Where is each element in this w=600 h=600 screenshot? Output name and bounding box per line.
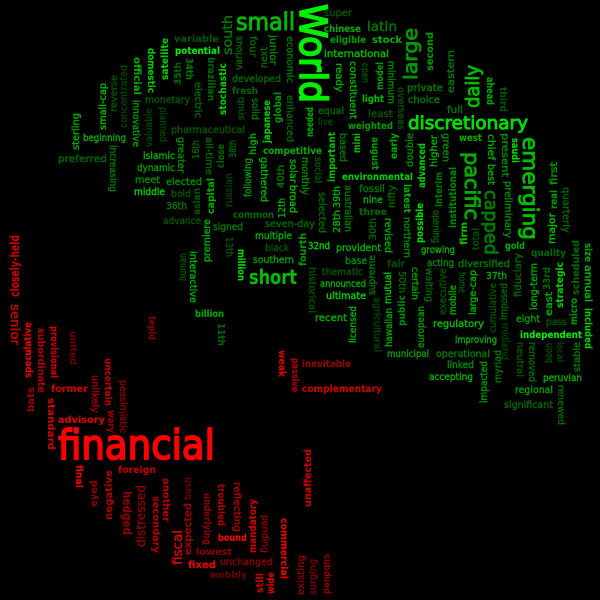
panel: green positive words: home (456, 272, 467, 293)
panel: green positive words: preliminary (502, 181, 513, 238)
panel: green positive words: innovative (130, 100, 141, 147)
panel: green positive words: diversified (458, 259, 510, 270)
panel: green positive words: nifty (387, 185, 398, 208)
panel: green positive words: 13th (223, 237, 234, 257)
panel: red negative words: mandatory (248, 499, 259, 553)
panel: red negative words: united (67, 331, 78, 365)
panel: green positive words: super (324, 8, 353, 19)
panel: green positive words: scheduled (571, 240, 582, 295)
panel: green positive words: variable (174, 34, 219, 45)
panel: green positive words: beginning (83, 133, 126, 144)
panel: red negative words: standard (45, 398, 56, 450)
panel: green positive words: asian (192, 188, 203, 215)
panel: green positive words: regulatory (433, 319, 484, 330)
panel: red negative words: surging (308, 559, 319, 595)
panel: red negative words: another (160, 478, 171, 522)
panel: green positive words: mini (352, 133, 363, 153)
panel: green positive words: greater (175, 137, 186, 174)
panel: green positive words: stock (372, 35, 402, 46)
panel: green positive words: monetary (145, 95, 190, 106)
panel: green positive words: electric (192, 82, 203, 118)
panel: red negative words: fixed (188, 560, 216, 571)
panel: green positive words: broad (287, 185, 298, 213)
panel: green positive words: concentrated (119, 65, 130, 128)
panel: green positive words: various (234, 36, 245, 70)
panel: green positive words: islamic (143, 151, 175, 162)
panel: red negative words: fiscal (171, 530, 186, 565)
panel: green positive words: latest (401, 184, 412, 213)
panel: green positive words: quality (531, 248, 566, 259)
panel: green positive words: impacted (479, 361, 490, 403)
panel: green positive words: 34th (183, 58, 194, 80)
panel: red negative words: wary (105, 410, 116, 433)
panel: green positive words: high (248, 133, 259, 155)
panel: green positive words: institutional (448, 167, 459, 228)
panel: green positive words: early (389, 133, 400, 159)
panel: green positive words: emerging (518, 137, 542, 240)
panel: green positive words: announced (320, 279, 366, 290)
panel: red negative words: speculative (23, 322, 34, 378)
panel: green positive words: neutral (514, 342, 525, 377)
panel: green positive words: boon (544, 343, 555, 363)
panel: green positive words: multiple (255, 231, 292, 242)
panel: red negative words: bush (183, 477, 194, 500)
panel: red negative words: underlying (201, 493, 212, 545)
panel: red negative words: pessimistic (117, 380, 128, 433)
panel: green positive words: elected (166, 177, 202, 188)
panel: red negative words: tepid (146, 316, 157, 340)
panel: green positive words: equal (318, 106, 344, 117)
panel: green positive words: live (318, 117, 333, 128)
panel: red negative words: negative (104, 470, 115, 520)
panel: green positive words: pharmaceutical (171, 125, 245, 136)
panel: green positive words: solar (287, 159, 298, 184)
panel: red negative words: hedged (120, 491, 134, 535)
panel: green positive words: chief (485, 134, 496, 161)
panel: green positive words: large-cap (468, 270, 479, 315)
panel: green positive words: supreme (367, 255, 378, 295)
panel: green positive words: higher (429, 134, 440, 167)
panel: green positive words: present (499, 133, 510, 177)
panel: green positive words: three (359, 207, 387, 218)
panel: green positive words: renewed (555, 385, 566, 425)
panel: green positive words: potential (175, 46, 220, 57)
panel: red negative words: weak (276, 350, 287, 377)
panel: green positive words: million (235, 249, 246, 281)
panel: green positive words: ahead (484, 77, 495, 105)
panel: red negative words: advisory (58, 415, 105, 426)
panel: green positive words: opening (430, 210, 441, 243)
panel: green positive words: 16th (191, 140, 202, 159)
panel: green positive words: real (549, 190, 560, 209)
panel: green positive words: overseas (395, 87, 406, 130)
panel: red negative words: inevitable (302, 359, 351, 370)
panel: green positive words: competitive (263, 146, 322, 157)
panel: red negative words (8, 235, 382, 595)
panel: green positive words: waiting (423, 268, 434, 302)
panel: red negative words: unlikely (89, 375, 100, 413)
panel: green positive words: 32nd (308, 241, 330, 252)
panel: green positive words: reverse (109, 75, 120, 112)
panel: green positive words: increasing (107, 145, 118, 192)
panel: green positive words: large (400, 28, 422, 80)
panel: green positive words: interim (434, 172, 445, 207)
panel: green positive words: human (178, 253, 189, 281)
panel: green positive words: small (236, 8, 295, 36)
panel: green positive words: russian (224, 173, 235, 207)
panel: green positive words: east (544, 292, 555, 316)
panel: green positive words: first (549, 162, 560, 185)
panel: green positive words: 38th (228, 140, 239, 158)
panel: green positive words: billion (195, 309, 224, 320)
panel: green positive words: capital (206, 178, 217, 214)
panel: green positive words: thematic (322, 267, 363, 278)
panel: green positive words: firm (459, 222, 470, 245)
panel: green positive words: nine (363, 195, 383, 206)
panel: green positive words: possible (415, 203, 426, 243)
panel: green positive words: total (471, 228, 482, 250)
panel: green positive words: snub (236, 97, 247, 120)
panel: green positive words: long-term (529, 263, 540, 310)
panel: red negative words: unchanged (220, 557, 273, 568)
panel: green positive words: advance (163, 216, 201, 227)
panel: green positive words: mobile (448, 285, 459, 315)
panel: green positive words: included (582, 308, 593, 349)
panel: green positive words: provident (336, 243, 381, 254)
panel: green positive words: west (459, 133, 482, 144)
panel: red negative words: reflecting (231, 482, 242, 532)
panel: green positive words: latin (367, 20, 397, 35)
panel: green positive words: eastern (446, 50, 457, 93)
panel: green positive words: executive (438, 268, 449, 315)
panel: green positive words: stable (572, 342, 583, 372)
panel: green positive words: south (221, 15, 236, 55)
panel: green positive words: solid (249, 98, 260, 120)
heading word: financial: financial (58, 421, 215, 469)
panel: green positive words: northern (401, 217, 412, 258)
panel: green positive words: australian (342, 185, 353, 232)
panel: red negative words: eyed (89, 480, 100, 507)
panel: green positive words: 37th (486, 271, 507, 282)
panel: green positive words: ready (333, 63, 344, 92)
panel: green positive words: japanese (262, 100, 273, 144)
panel: green positive words: model (375, 62, 386, 90)
panel: red negative words: secondary (150, 496, 161, 553)
panel: green positive words: 40th (276, 165, 287, 188)
panel: green positive words: strategic (555, 262, 566, 308)
panel: green positive words: chinese (324, 24, 361, 35)
panel: red negative words: bound (218, 533, 247, 544)
panel: green positive words: 28th (332, 210, 343, 233)
panel: green positive words: independent (520, 330, 582, 341)
panel: green positive words: black (265, 243, 289, 254)
panel: green positive words: green (440, 133, 451, 162)
panel: green positive words: peruvian (543, 373, 582, 384)
panel: green positive words: advanced (417, 143, 428, 188)
panel: green positive words: full (447, 105, 463, 116)
panel: green positive words: gold (505, 241, 525, 252)
panel: green positive words: valuable (144, 108, 155, 147)
panel: green positive words: 35th (173, 62, 184, 85)
panel: green positive words: eligible (330, 35, 366, 46)
panel: green positive words: mutual (383, 272, 394, 304)
panel: green positive words: cumulative (488, 283, 499, 333)
panel: green positive words: agricultural (371, 297, 382, 352)
panel: green positive words: municipal (387, 349, 429, 360)
panel: green positive words: signed (213, 222, 243, 233)
panel: green positive words: midland (499, 323, 510, 360)
panel: green positive words: european (416, 306, 427, 348)
panel: green positive words: light (362, 94, 384, 105)
panel: green positive words: saudi (509, 138, 520, 163)
panel: green positive words: close (216, 144, 227, 168)
panel: red negative words: still (255, 573, 266, 593)
panel: green positive words: 33rd (542, 267, 553, 290)
panel: green positive words: choice (408, 95, 440, 106)
panel: green positive words: daily (462, 65, 484, 108)
panel: green positive words: weighted (348, 121, 393, 132)
panel: green positive words: monthly (299, 157, 310, 195)
panel: green positive words: accepting (429, 372, 473, 383)
panel: red negative words: former (51, 384, 88, 395)
panel: red negative words: existing (296, 555, 307, 595)
panel: green positive words: hawaiian (384, 308, 395, 347)
panel: red negative words: provisional (48, 326, 59, 378)
panel: green positive words: fiduciary (513, 253, 524, 297)
panel: green positive words: southern (253, 255, 294, 266)
panel: green positive words: regional (515, 385, 553, 396)
panel: green positive words: global (273, 92, 284, 123)
panel: green positive words: august (369, 137, 380, 170)
panel: red negative words: pending (259, 515, 270, 553)
heading word: World: World (291, 4, 334, 103)
panel: green positive words (58, 4, 593, 425)
panel: green positive words: pacific (460, 152, 484, 220)
panel: green positive words: important (327, 132, 338, 182)
panel: green positive words: needed (305, 107, 316, 137)
panel: green positive words: private (407, 83, 443, 94)
panel: green positive words: certain (409, 267, 420, 300)
panel: green positive words: second (425, 32, 436, 71)
panel: green positive words: planned (157, 107, 168, 142)
panel: green positive words: eight (516, 314, 540, 325)
panel: green positive words: all-time (203, 137, 214, 175)
panel: red negative words: subordinate (35, 328, 46, 393)
panel: green positive words: stochastic (218, 63, 229, 115)
panel: green positive words: middle (134, 187, 165, 198)
panel: red negative words: distressed (134, 485, 148, 547)
panel: red negative words: foreign (118, 465, 156, 476)
panel: green positive words: economic (284, 36, 295, 83)
panel: green positive words: selected (316, 192, 327, 233)
panel: green positive words: double (405, 133, 416, 167)
panel: green positive words: based (337, 133, 348, 162)
panel: green positive words: ultimate (326, 291, 366, 302)
panel: green positive words: public (397, 295, 408, 326)
panel: red negative words: uncertain (102, 358, 113, 406)
panel: green positive words: gathered (258, 157, 269, 202)
panel: green positive words: junior (267, 34, 278, 66)
panel: green positive words: imposed (499, 283, 510, 320)
panel: green positive words: quarterly (560, 187, 571, 233)
panel: red negative words: senior (8, 304, 22, 345)
panel: green positive words: environmental (342, 172, 413, 183)
panel: green positive words: historical (306, 267, 317, 313)
panel: green positive words: preferred (58, 154, 107, 165)
panel: red negative words: passive (289, 358, 300, 392)
panel: green positive words: satellite (160, 38, 171, 80)
panel: green positive words: four (247, 36, 258, 58)
panel: red negative words: expected (183, 503, 194, 555)
panel: green positive words: myriad (493, 350, 504, 383)
panel: green positive words: linked (447, 360, 474, 371)
panel: green positive words: premiere (202, 219, 213, 262)
panel: green positive words: third (497, 87, 508, 112)
panel: red negative words: troubled (215, 484, 226, 526)
panel: green positive words: annual (582, 265, 593, 302)
panel: red negative words: complementary (302, 384, 382, 395)
panel: green positive words: 50th (396, 271, 407, 293)
panel: green positive words: local (554, 342, 565, 362)
panel: green positive words: following (243, 158, 254, 197)
panel: green positive words: small-cap (98, 83, 109, 130)
panel: green positive words: improving (455, 335, 497, 346)
panel: green positive words: 39th (332, 186, 343, 208)
panel: red negative words: unaffected (303, 449, 314, 507)
panel: green positive words: least (368, 109, 393, 120)
panel: green positive words: micro (569, 298, 580, 325)
panel: green positive words: capped (480, 190, 501, 255)
panel: green positive words: major (547, 212, 558, 244)
panel: green positive words: dynamic (137, 163, 175, 174)
panel: green positive words: recent (315, 313, 347, 324)
panel: green positive words: 11th (215, 323, 226, 346)
panel: green positive words: operational (436, 349, 490, 360)
panel: green positive words: bold (171, 189, 191, 200)
panel: green positive words: fair (387, 259, 406, 270)
panel: green positive words: licensed (348, 306, 359, 343)
panel: green positive words: sterling (71, 113, 82, 150)
panel: green positive words: seven-day (265, 219, 315, 230)
panel: red negative words: bats (26, 387, 37, 412)
panel: green positive words: 30th (368, 218, 379, 240)
panel: green positive words: constituent (347, 61, 358, 119)
panel: red negative words: wobbly (210, 570, 247, 581)
panel: red negative words: wide (266, 572, 277, 594)
panel: green positive words: significant (504, 400, 553, 411)
panel: red negative words: lowest (196, 547, 232, 558)
panel: green positive words: official (131, 57, 142, 95)
panel: green positive words: size (582, 243, 593, 262)
panel: red negative words: closely-held (8, 235, 22, 297)
panel: green positive words: meet (135, 175, 160, 186)
panel: green positive words: best (485, 164, 496, 185)
panel: green positive words: domestic (145, 48, 156, 93)
panel: green positive words: 36th (166, 201, 187, 212)
panel: green positive words: 12th (277, 198, 288, 218)
panel: red negative words: final (73, 465, 84, 488)
panel: green positive words: open (359, 63, 370, 83)
panel: green positive words: international (324, 49, 389, 60)
panel: red negative words: commercial (278, 518, 289, 579)
panel: green positive words: revised (382, 218, 393, 253)
panel: green positive words: pass (546, 317, 567, 328)
panel: green positive words: brazilian (205, 57, 216, 101)
panel: green positive words: minimum (385, 61, 396, 104)
panel: green positive words: growing (421, 245, 455, 256)
panel: green positive words: base (345, 256, 367, 267)
panel: green positive words: acting (427, 258, 454, 269)
panel: green positive words: short (249, 265, 297, 289)
panel: green positive words: fourth (298, 233, 309, 266)
panel: green positive words: enhanced (284, 95, 295, 142)
panel: green positive words: fossil (359, 184, 385, 195)
panel: green positive words: social (312, 157, 323, 183)
panel: green positive words: common (233, 210, 274, 221)
panel: green positive words: discretionary (408, 113, 528, 134)
panel: green positive words: fresh (232, 86, 258, 97)
panel: green positive words: interactive (187, 251, 198, 303)
panel: green positive words: developed (232, 74, 281, 85)
panel: green positive words: next (259, 47, 270, 68)
panel: green positive words: removed (526, 342, 537, 382)
